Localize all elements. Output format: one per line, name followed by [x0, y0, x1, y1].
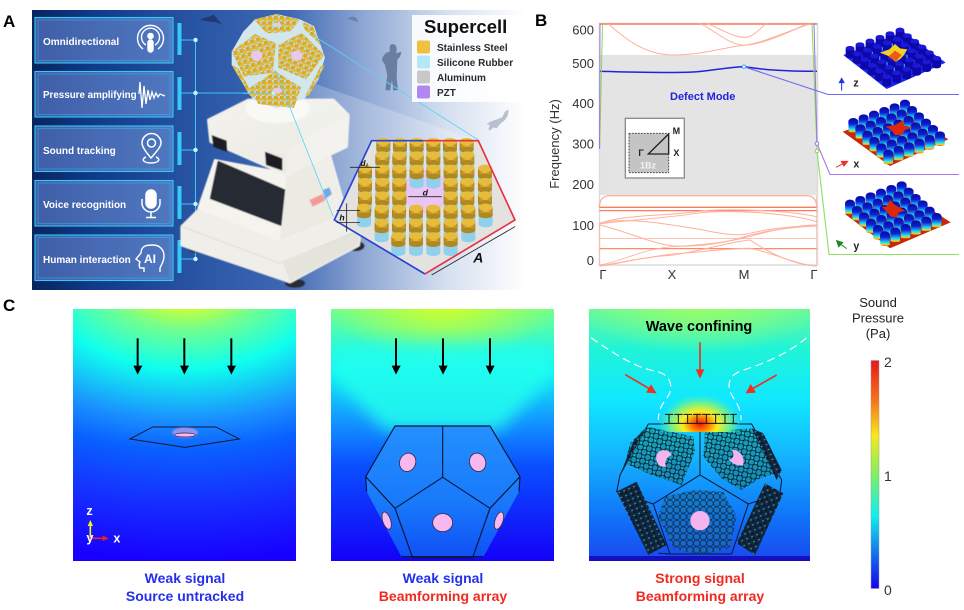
pressure field	[73, 309, 296, 561]
x direction arrow	[836, 161, 848, 167]
red confining arrows	[625, 342, 777, 393]
Brillouin zone inset: X	[673, 148, 679, 158]
dashed wave boundaries	[591, 338, 807, 420]
panel C2: beamforming array without confinement	[331, 309, 554, 604]
incoming wave arrows	[392, 338, 495, 375]
coordinate axes	[86, 504, 120, 545]
feature: Human interaction	[35, 235, 173, 280]
head	[208, 100, 348, 175]
left face	[232, 34, 276, 77]
legend labels: Silicone Rubber	[437, 58, 513, 69]
resonator clusters	[617, 427, 783, 555]
y axis tick labels: 600	[572, 22, 594, 38]
dimension labels	[337, 159, 515, 275]
panel label B: B	[535, 11, 547, 30]
dimension labels: d	[423, 187, 429, 197]
icon: microphone	[142, 190, 160, 218]
Brillouin zone inset	[625, 118, 684, 178]
pressure field	[589, 309, 810, 561]
mode shapes	[836, 28, 951, 252]
icon: decaying waveform	[139, 82, 165, 108]
coordinate axes: y	[86, 531, 93, 545]
icon: location pin	[142, 134, 161, 163]
caption: Beamforming array	[636, 588, 764, 604]
y axis tick labels: 0	[587, 253, 594, 268]
caption	[636, 570, 764, 604]
colour bar title: Pressure	[852, 310, 904, 326]
mode markers	[742, 65, 819, 153]
zoom projection wedge	[276, 70, 515, 274]
camera right	[265, 152, 282, 171]
base block	[182, 207, 360, 282]
mode z	[839, 28, 946, 91]
Brillouin zone inset: Γ	[638, 148, 644, 158]
y axis tick labels: 400	[572, 96, 594, 111]
y axis tick labels: 500	[572, 56, 594, 71]
feature: Voice recognition: Voice recognition	[43, 200, 126, 211]
mode z: z	[853, 78, 859, 90]
band diagram panel B	[547, 22, 959, 282]
steep green and purple branches	[600, 23, 817, 151]
top row of resonators	[664, 414, 737, 423]
dodecahedron frame	[617, 424, 782, 554]
Brillouin zone inset: M	[673, 126, 680, 136]
band curves	[599, 23, 817, 266]
z direction arrow	[839, 78, 844, 91]
legend labels: Stainless Steel	[437, 43, 508, 54]
dimension labels: A	[472, 250, 483, 266]
supercell close-up	[334, 138, 515, 275]
x axis tick labels: Γ	[810, 267, 818, 282]
icon: broadcast person	[138, 25, 164, 52]
base plate	[334, 141, 515, 274]
wheels	[189, 241, 364, 288]
neck	[245, 93, 310, 123]
dimension labels: d₁	[361, 159, 369, 168]
side badge	[309, 187, 332, 207]
connector lines linking features to robot	[178, 23, 275, 273]
pentagon edges	[334, 141, 515, 274]
panel A background	[32, 10, 526, 290]
supercell legend	[412, 15, 524, 102]
right face	[278, 33, 324, 79]
feature: Pressure amplifying: Pressure amplifying	[43, 90, 137, 101]
colour bar title: (Pa)	[866, 326, 890, 341]
feature: Human interaction: Human interaction	[43, 255, 131, 266]
defect mode label: Defect Mode	[670, 91, 735, 103]
y axis title: Frequency (Hz)	[547, 99, 562, 189]
y axis tick labels: 200	[572, 177, 594, 192]
feature: Sound tracking: Sound tracking	[43, 146, 116, 157]
leader lines to mode shapes	[744, 67, 959, 254]
x axis tick labels: Γ	[599, 267, 607, 282]
PZT defect	[403, 170, 448, 213]
pressure field	[331, 309, 554, 561]
cylinders	[357, 138, 493, 256]
dark screen	[211, 162, 284, 225]
mode x	[836, 100, 948, 171]
colour bar ticks	[884, 354, 892, 598]
y axis tick labels: 100	[572, 218, 594, 233]
colour bar ticks: 2	[884, 354, 892, 370]
icon: AI head: AI	[144, 252, 156, 266]
robot body	[182, 93, 364, 288]
y axis tick labels: 300	[572, 136, 594, 152]
caption	[379, 570, 507, 604]
dodecahedron	[366, 426, 520, 557]
feature: Pressure amplifying	[35, 72, 173, 117]
feature: Voice recognition	[35, 180, 173, 226]
dimension labels: h	[339, 213, 345, 223]
feature: Sound tracking	[35, 126, 173, 172]
x axis tick labels	[599, 267, 818, 282]
colour bar legend	[852, 295, 904, 598]
caption: Strong signal	[655, 570, 745, 586]
PZT spot	[172, 427, 198, 438]
mode y	[837, 181, 951, 252]
mode y: y	[853, 240, 859, 252]
colour bar	[871, 360, 879, 588]
legend labels	[437, 43, 513, 99]
caption	[126, 570, 244, 604]
colour bar ticks: 0	[884, 582, 892, 598]
y direction arrow	[837, 241, 847, 249]
incoming wave arrows	[133, 338, 236, 375]
colour bar title	[852, 295, 904, 341]
caption: Weak signal	[145, 570, 225, 586]
torso	[198, 155, 347, 241]
colour bar ticks: 1	[884, 468, 892, 484]
x axis tick labels: M	[739, 267, 749, 282]
PZT holes	[656, 450, 744, 530]
plate outline	[130, 427, 239, 447]
caption: Beamforming array	[379, 588, 507, 604]
panel C3: strong signal with wave confining	[589, 309, 810, 604]
panel label C: C	[3, 296, 15, 315]
coordinate axes: x	[113, 531, 120, 545]
dodecahedral robot head array	[232, 14, 478, 217]
coordinate axes: z	[86, 504, 93, 518]
top face	[254, 14, 300, 33]
camera left	[212, 135, 227, 152]
x axis tick labels: X	[668, 267, 677, 282]
legend title: Supercell	[424, 16, 507, 37]
colour bar title: Sound	[859, 295, 897, 310]
panel C1: bare plate	[73, 309, 296, 604]
y axis tick labels	[572, 22, 594, 268]
caption: Weak signal	[403, 570, 483, 586]
legend labels: Aluminum	[437, 73, 486, 84]
legend labels: PZT	[437, 88, 456, 99]
PZT holes	[380, 451, 506, 532]
PZT holes	[251, 23, 302, 94]
bottom face	[249, 71, 301, 108]
plot frame	[600, 24, 818, 265]
defect mode band	[600, 67, 817, 73]
mode x: x	[853, 159, 859, 171]
feature: Omnidirectional	[35, 18, 173, 63]
silhouettes of bird, person and cat	[200, 15, 509, 131]
side faces	[232, 22, 325, 98]
Brillouin zone inset: 1Bz	[640, 160, 656, 170]
caption: Source untracked	[126, 588, 244, 604]
legend swatches	[417, 40, 430, 98]
panel label A: A	[3, 12, 15, 31]
hot spot above the array	[658, 395, 742, 432]
band gap shading	[600, 55, 818, 195]
feature: Omnidirectional: Omnidirectional	[43, 37, 119, 48]
heading: Wave confining	[646, 319, 752, 335]
feature list panel	[35, 18, 173, 280]
